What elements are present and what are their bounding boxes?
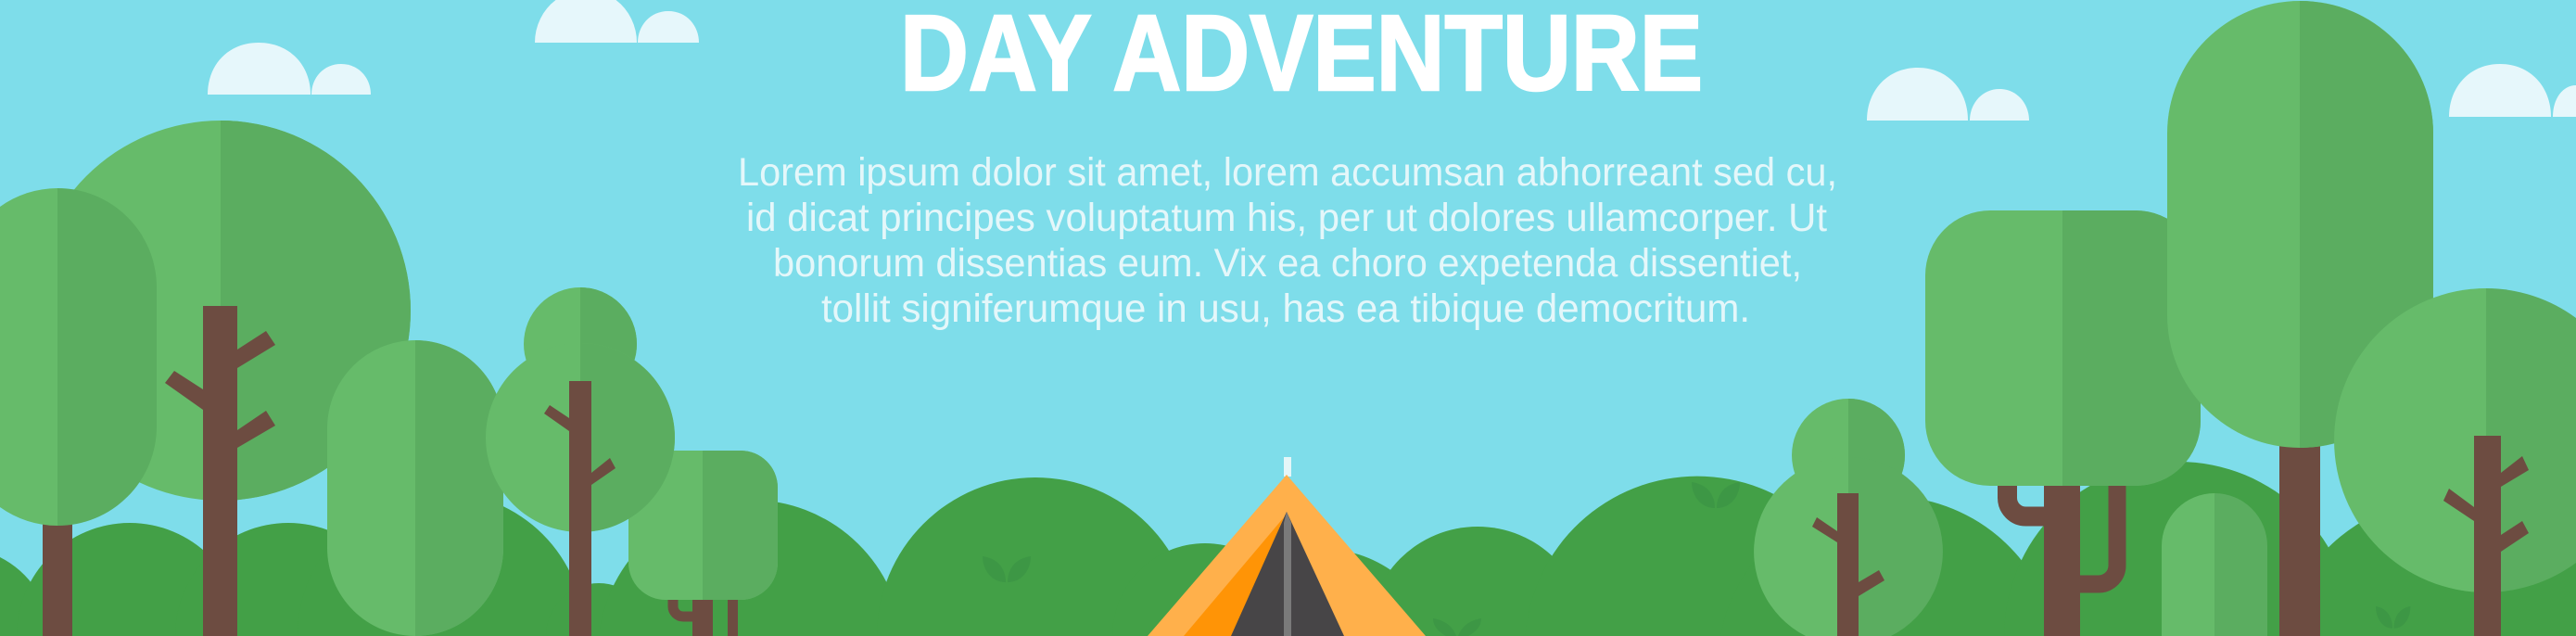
leaf sprout 4: [2376, 606, 2410, 629]
leaf sprout 3: [1692, 482, 1740, 508]
body text: [738, 150, 1837, 331]
tree: double round right: [1754, 399, 1943, 636]
green hills: [0, 462, 2576, 636]
body text: Lorem ipsum dolor sit amet, lorem accumsan abhorreant sed cu,: [738, 150, 1837, 195]
leaf sprout 2: [1433, 618, 1481, 636]
body text: bonorum dissentias eum. Vix ea choro expetenda dissentiet,: [773, 241, 1802, 286]
cloud: right of text: [1867, 68, 2029, 121]
tree: rounded square right with hooked branches: [1925, 210, 2201, 636]
tree: large round far right: [2334, 288, 2576, 636]
cloud: upper left: [208, 43, 371, 95]
tree: small pill bush right: [2162, 493, 2267, 636]
tree: tall pill far left: [0, 188, 157, 636]
tent: [1148, 457, 1426, 636]
cloud: far right: [2449, 64, 2576, 117]
tree: large round left: [31, 121, 411, 636]
tree: pill bush left: [327, 340, 503, 636]
body text: id dicat principes voluptatum his, per ut dolores ullamcorper. Ut: [746, 196, 1827, 240]
body text: tollit signiferumque in usu, has ea tibique democritum.: [821, 286, 1750, 331]
cloud: top centre left: [535, 0, 699, 43]
tree: tallest pill right: [2167, 1, 2433, 636]
tree: rounded square small left: [628, 451, 778, 636]
tree: double round left: [486, 287, 675, 636]
leaf sprout 1: [983, 556, 1031, 582]
